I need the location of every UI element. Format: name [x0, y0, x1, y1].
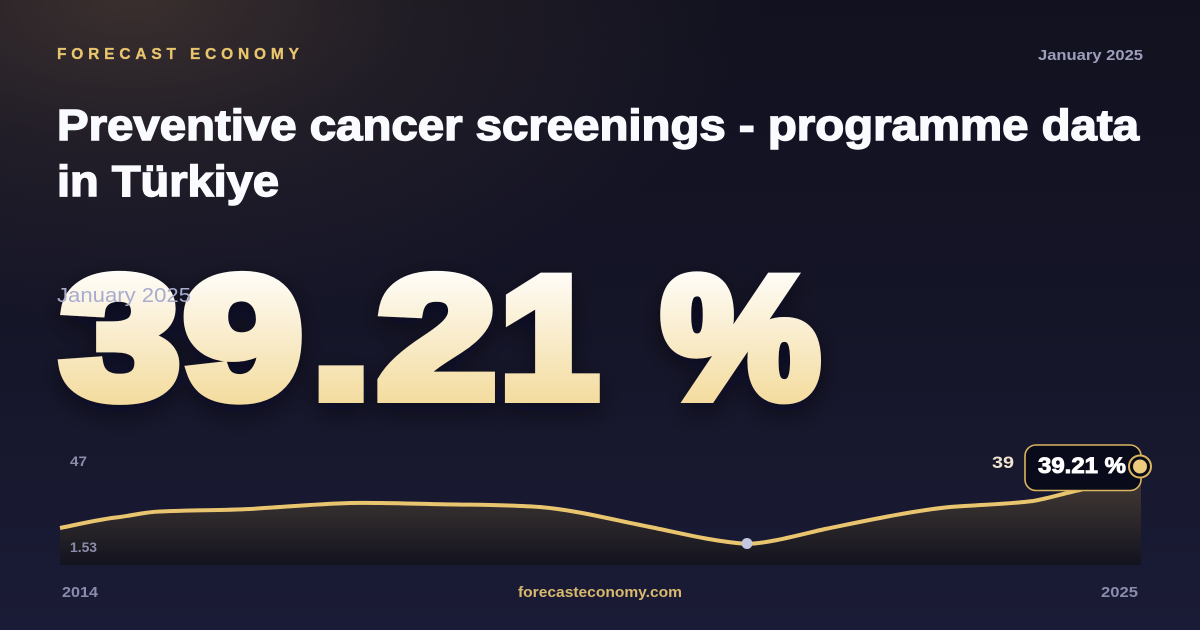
trend line	[60, 466, 1141, 544]
big value: 39.2	[61, 243, 496, 434]
axis max label: 47	[70, 454, 87, 469]
latest rounded value: 39	[992, 453, 1014, 472]
website: forecasteconomy.com	[518, 585, 682, 601]
end year: 2025	[1101, 585, 1138, 601]
brand eyebrow: FORECAST ECONOMY	[57, 46, 300, 63]
big value	[61, 241, 820, 434]
area chart	[60, 466, 1141, 565]
area fill	[60, 466, 1141, 565]
title: in Türkiye	[57, 157, 279, 206]
date top right: January 2025	[1038, 47, 1143, 64]
value callout: 39.21 %	[1038, 453, 1126, 478]
axis min label: 1.53	[70, 540, 97, 555]
title: Preventive cancer screenings - programme data	[57, 101, 1140, 150]
big value: %	[662, 241, 820, 433]
latest point marker	[1129, 456, 1151, 478]
overlapping date label: January 2025	[57, 285, 191, 307]
minimum marker	[742, 538, 752, 549]
start year: 2014	[62, 585, 98, 601]
value callout	[1025, 445, 1141, 490]
title	[57, 101, 1140, 206]
big value: 1	[500, 241, 599, 433]
